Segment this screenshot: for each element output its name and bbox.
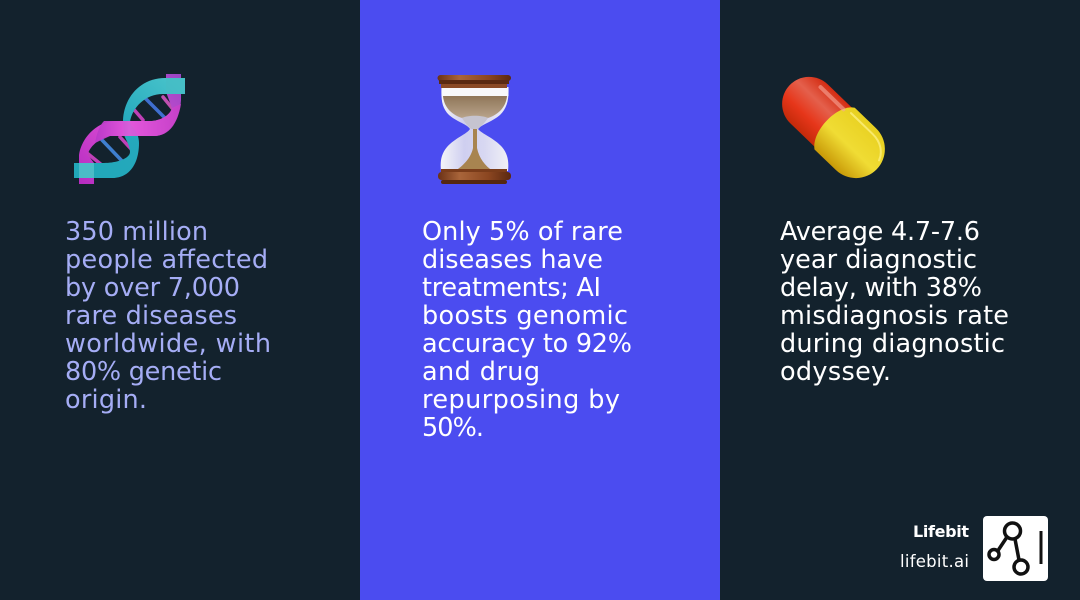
text: middle statistic: treatments; AI	[422, 273, 601, 303]
text: left statistic: worldwide, with	[65, 329, 271, 359]
text: middle statistic: and drug	[422, 357, 540, 387]
text: left statistic: rare diseases	[65, 301, 237, 331]
text: middle statistic: diseases have	[422, 245, 603, 275]
text: left statistic: by over 7,000	[65, 273, 240, 303]
text: left statistic: 350 million	[65, 217, 208, 247]
text: middle statistic: repurposing by	[422, 385, 620, 415]
brand name: Lifebit	[913, 522, 969, 541]
icon: hourglass	[438, 75, 511, 184]
text: middle statistic: Only 5% of rare	[422, 217, 623, 247]
text: left statistic: origin.	[65, 385, 147, 415]
text: right statistic: year diagnostic	[780, 245, 977, 275]
text: right statistic: delay, with 38%	[780, 273, 982, 303]
text: right statistic	[780, 217, 1009, 387]
text: right statistic: misdiagnosis rate	[780, 301, 1009, 331]
panel: right background	[720, 0, 1080, 600]
panel: left background	[0, 0, 360, 600]
text: left statistic	[65, 217, 271, 415]
text: right statistic: Average 4.7-7.6	[780, 217, 980, 247]
panel: middle background	[360, 0, 720, 600]
text: middle statistic: 50%.	[422, 413, 484, 443]
icon: Lifebit logo	[983, 516, 1048, 581]
text: left statistic: 80% genetic	[65, 357, 222, 387]
text: left statistic: people affected	[65, 245, 268, 275]
text: right statistic: odyssey.	[780, 357, 891, 387]
text: middle statistic: accuracy to 92%	[422, 329, 632, 359]
brand url: lifebit.ai	[900, 552, 969, 571]
icon: DNA helix	[74, 74, 185, 184]
icon: capsule pill	[770, 64, 897, 190]
text: right statistic: during diagnostic	[780, 329, 1005, 359]
text: middle statistic	[422, 217, 632, 443]
text: middle statistic: boosts genomic	[422, 301, 628, 331]
